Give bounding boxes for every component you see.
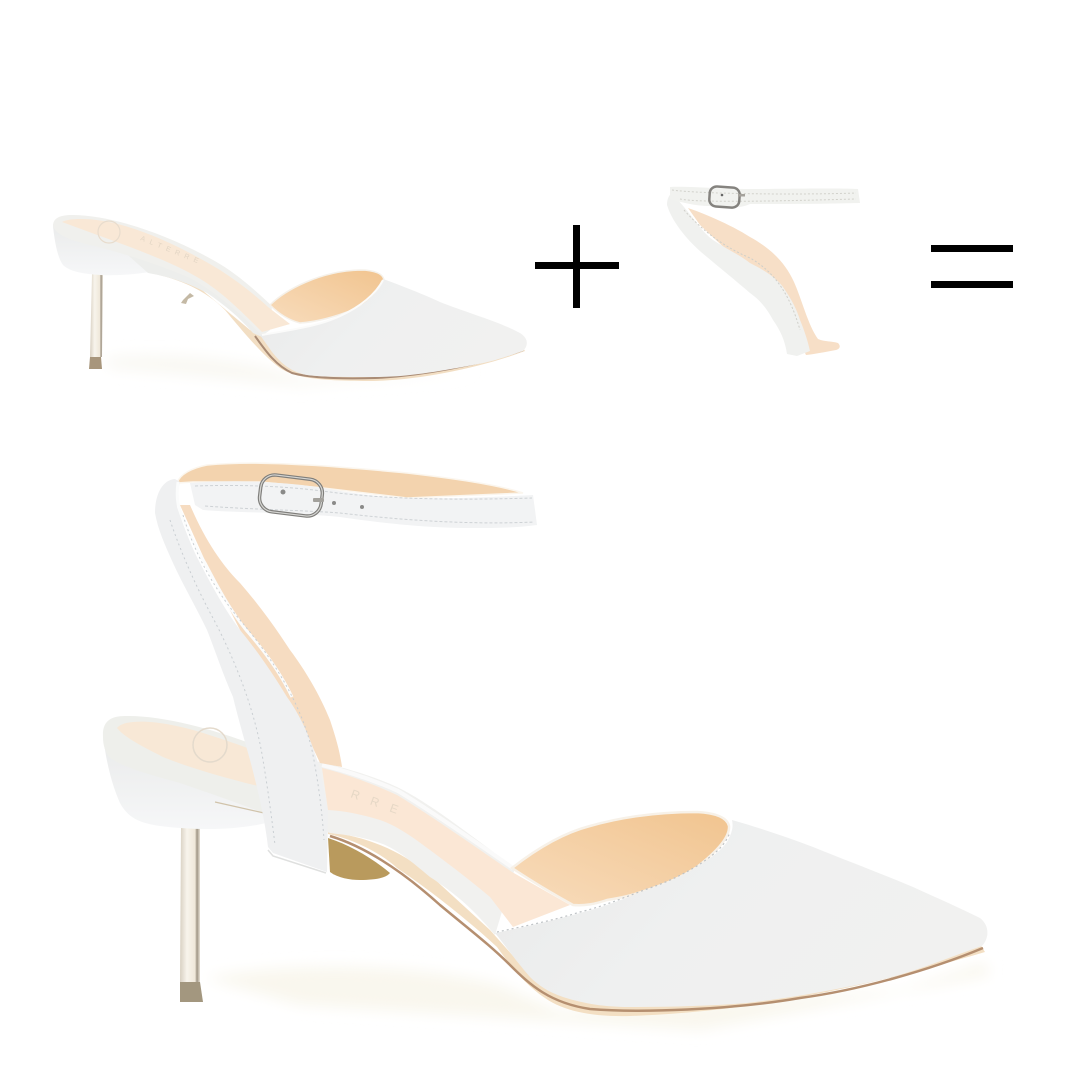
large heel: sole line [330,836,983,1011]
top mule shoe [53,215,527,386]
small mule: sole line [255,336,523,378]
small mule: heel shell [53,220,170,275]
small mule: sole [150,273,525,381]
large heel: heel gold line [215,802,264,813]
small strap: hanging section [667,193,810,356]
large heel: heel rim [103,716,264,813]
small mule: heel logo [98,221,120,243]
large heel: ankle stitching [195,485,534,523]
small mule: toe opening [270,270,384,323]
large heel: floor shadow [205,962,990,1030]
large heel: strap end [268,850,326,873]
small mule: brand mark: ALTERRE [139,235,204,267]
large heel: buckle highlight [258,473,324,518]
large heel: sole edge [328,832,985,1016]
small mule: screw [181,293,194,304]
small strap: band stitching [672,190,856,201]
small strap: band [670,187,860,208]
small mule: vamp [260,279,527,377]
large heel: pin tip [180,982,203,1002]
large heel: front insole [322,768,570,927]
large heel: buckle pin [313,498,324,502]
large heel: heel logo [193,728,227,762]
small ankle strap [667,186,860,356]
large heel: vamp [495,820,987,1007]
large heel: insole edge [322,765,513,868]
small strap: buckle pin [738,194,745,196]
large heel: arch gold [328,838,390,880]
small strap: hole [721,194,723,196]
small strap: hanging stitching [684,210,800,330]
large heel: insole [117,722,262,787]
small mule: vamp stitching [262,280,383,335]
small mule: insole [62,219,290,332]
large heel: vamp stitching [497,832,730,932]
large heel: front strip [258,748,515,935]
small mule: pin tip [89,357,102,369]
large heel: ankle lining [177,463,523,498]
small mule: metal pin [90,274,103,357]
large heel: hanging strap [155,479,328,872]
large heel: brand mark: RRE [349,787,411,821]
equals sign [931,245,1013,288]
plus sign [535,225,619,308]
small mule: floor shadow [105,355,480,386]
large heel: metal pin [180,826,200,982]
small strap: lining [688,208,840,355]
large heel: strap lining [180,505,342,767]
large heel: toe opening [512,812,729,905]
large heel: hanging piping [177,482,292,697]
large heel: heel shell [103,735,270,829]
small strap: buckle [709,186,740,208]
large heel: buckle [258,473,324,518]
large heel: strap holes [280,490,364,509]
small mule: heel rim and insole base [53,215,272,336]
large heel: ankle band [190,481,537,528]
large strappy heel [103,463,990,1030]
small mule: side wall [120,248,272,337]
large heel: strap stitching [170,515,324,845]
